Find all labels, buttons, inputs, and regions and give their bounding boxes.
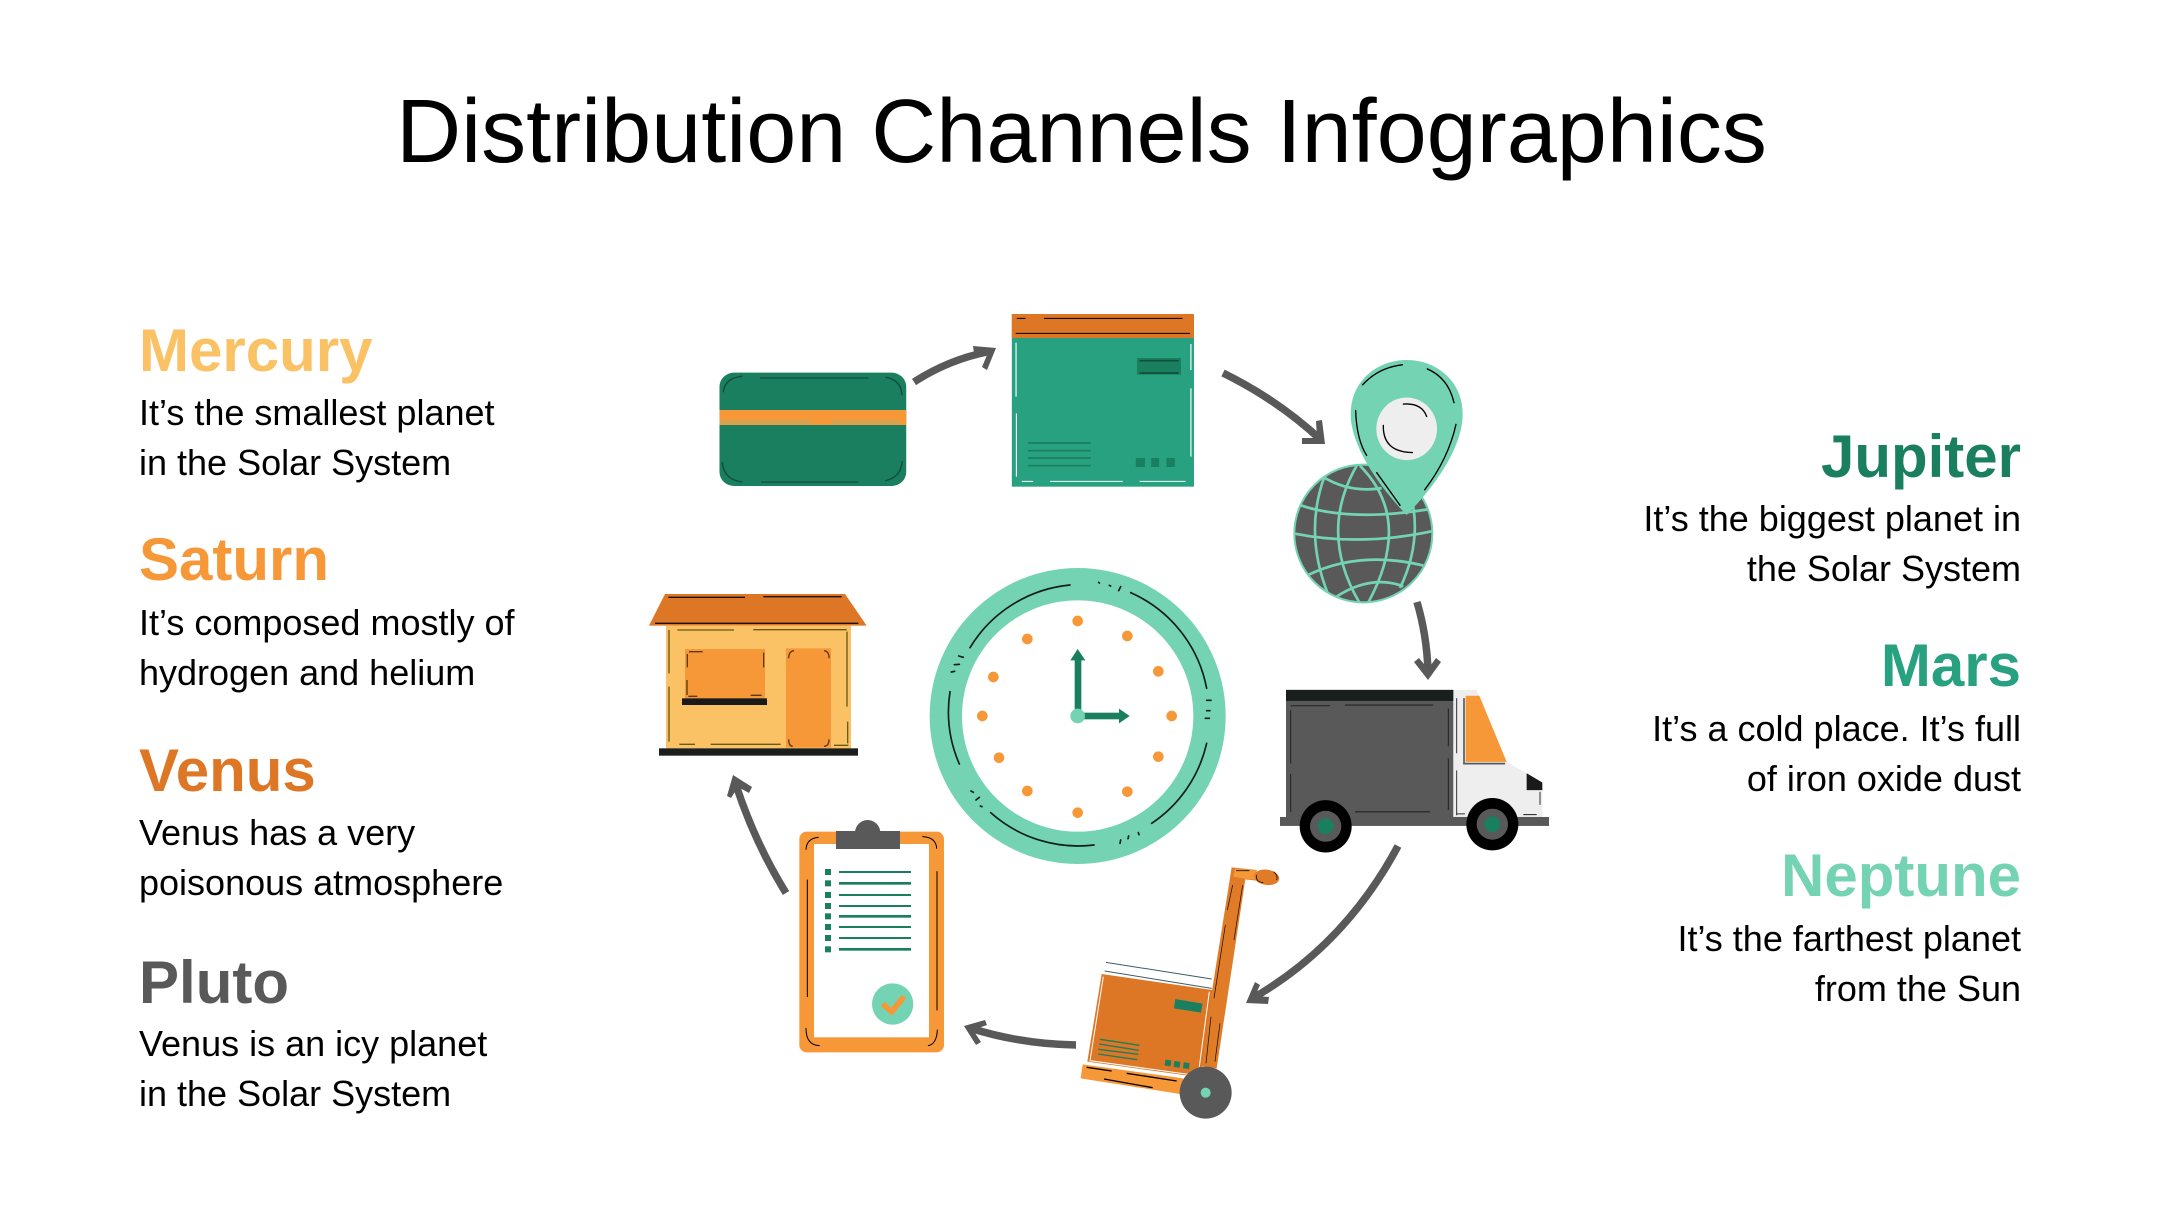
text block: Pluto (139, 949, 487, 1114)
text block: Jupiter: It’s the biggest planet in (1643, 498, 2021, 539)
icon: globe and location pin (1294, 360, 1463, 602)
text block: Saturn (139, 526, 515, 693)
text block: Mercury: Mercury (139, 317, 373, 384)
text block: Venus (139, 737, 503, 903)
icon: credit card (719, 373, 906, 486)
text block: Mercury: It’s the smallest planet (139, 392, 495, 433)
text block: Jupiter: the Solar System (1747, 548, 2021, 589)
arrow: box to globe (1223, 373, 1325, 444)
arrow: card to box (914, 346, 996, 382)
icon: clipboard checklist (799, 820, 944, 1052)
text block: Venus: poisonous atmosphere (139, 862, 503, 903)
text block: Neptune (1677, 842, 2021, 1009)
text block: Saturn: It’s composed mostly of (139, 602, 515, 643)
text block: Venus: Venus has a very (139, 812, 415, 853)
text block: Neptune: from the Sun (1815, 968, 2021, 1009)
text block: Jupiter: Jupiter (1821, 423, 2021, 490)
arrow: hand truck to clipboard (964, 1020, 1076, 1045)
icon: parcel box (1012, 314, 1194, 487)
text block: Pluto: Pluto (139, 949, 289, 1016)
text block: Jupiter (1643, 423, 2021, 589)
icon: delivery truck (1280, 690, 1549, 852)
text block: Neptune: Neptune (1781, 842, 2021, 909)
arrow: truck to hand truck (1246, 846, 1398, 1004)
arrow: globe to truck (1414, 602, 1441, 680)
icon: hand truck with box (1081, 867, 1280, 1119)
title: Distribution Channels Infographics (396, 82, 1767, 182)
text block: Mars: It’s a cold place. It’s full (1652, 708, 2021, 749)
text block: Saturn: Saturn (139, 526, 329, 593)
arrow: clipboard to shop (727, 775, 786, 893)
text block: Pluto: in the Solar System (139, 1073, 451, 1114)
text block: Mars: Mars (1881, 632, 2021, 699)
text block: Venus: Venus (139, 737, 316, 804)
text block: Mercury (139, 317, 495, 483)
text block: Mercury: in the Solar System (139, 442, 451, 483)
icon: clock (930, 568, 1226, 864)
text block: Pluto: Venus is an icy planet (139, 1023, 487, 1064)
text block: Neptune: It’s the farthest planet (1677, 918, 2021, 959)
text block: Mars: of iron oxide dust (1747, 758, 2021, 799)
text block: Mars (1652, 632, 2021, 799)
icon: shop (649, 594, 867, 756)
text block: Saturn: hydrogen and helium (139, 652, 475, 693)
